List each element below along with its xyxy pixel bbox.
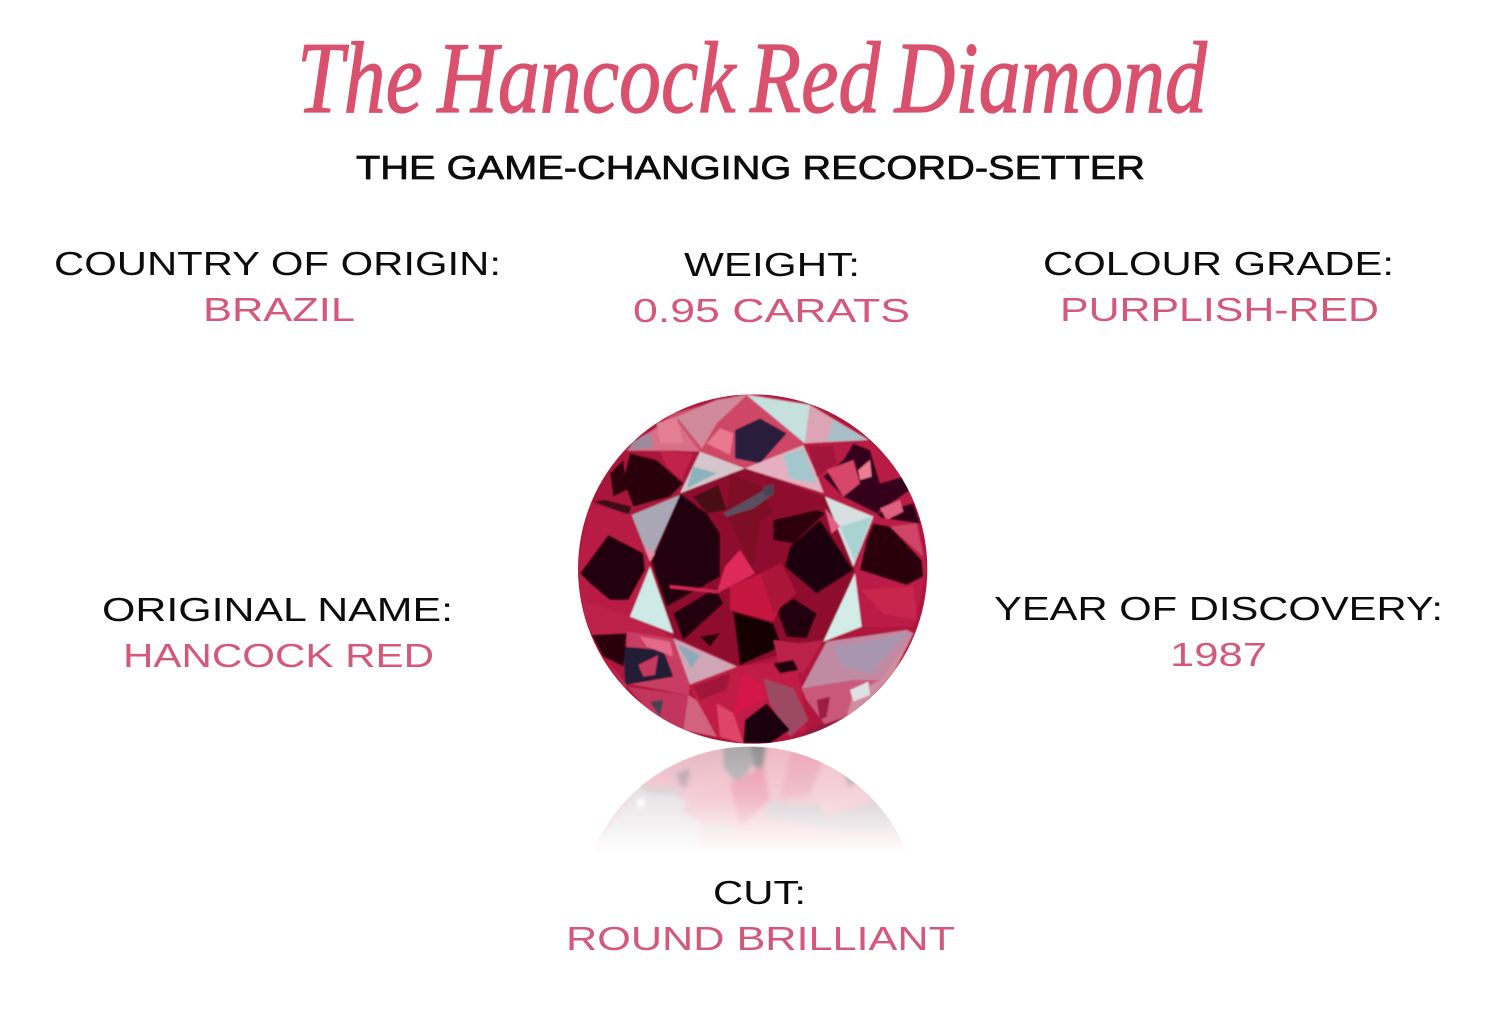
fact: colour grade [1043, 246, 1394, 329]
fact: cut [566, 875, 955, 958]
title: The Hancock Red Diamond [297, 22, 1208, 135]
fact: colour grade: PURPLISH-RED [1060, 292, 1379, 329]
fact: country of origin: BRAZIL [203, 292, 355, 329]
fact: year of discovery [994, 591, 1443, 674]
fact: country of origin: COUNTRY OF ORIGIN: [54, 246, 501, 283]
fact: colour grade: COLOUR GRADE: [1043, 246, 1394, 283]
diamond reflection [598, 746, 903, 844]
fact: cut: CUT: [713, 875, 806, 912]
fact: weight: WEIGHT: [684, 247, 860, 284]
fact: cut: ROUND BRILLIANT [566, 921, 955, 958]
fact: year of discovery: 1987 [1170, 637, 1267, 674]
fact: original name: HANCOCK RED [123, 638, 434, 675]
fact: original name: ORIGINAL NAME: [102, 592, 453, 629]
fact: weight: 0.95 CARATS [633, 293, 910, 330]
fact: year of discovery: YEAR OF DISCOVERY: [994, 591, 1443, 628]
fact: weight [633, 247, 910, 330]
fact: original name [102, 592, 453, 675]
subtitle: THE GAME-CHANGING RECORD-SETTER [356, 150, 1145, 187]
fact: country of origin [54, 246, 501, 329]
red diamond illustration [573, 390, 933, 750]
